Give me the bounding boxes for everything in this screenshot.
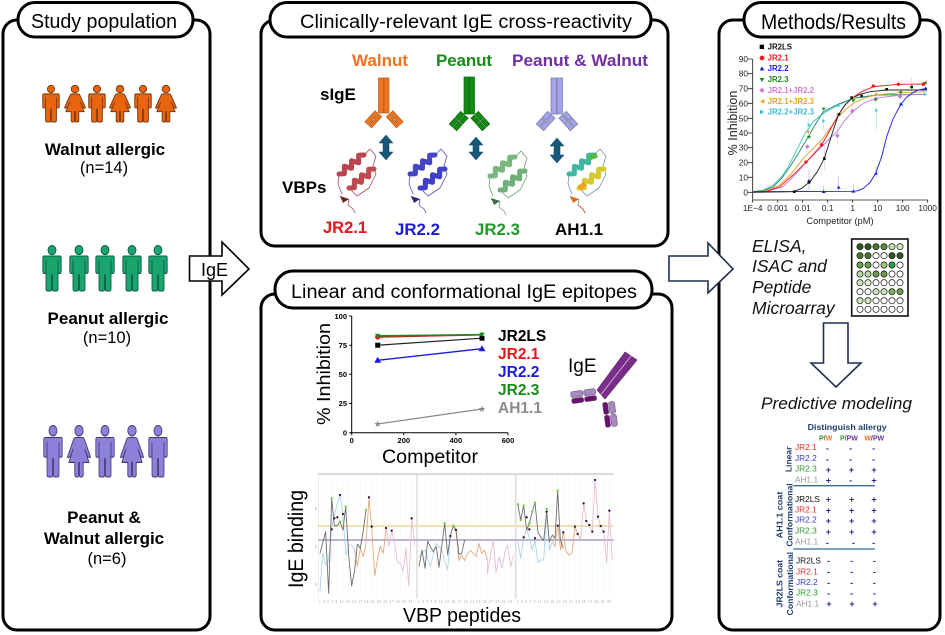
protein labels: JR2.3 <box>475 220 520 239</box>
table: distinguish allergy: + <box>849 465 854 475</box>
table: distinguish allergy: - <box>849 443 852 453</box>
table: distinguish allergy: - <box>852 538 855 548</box>
table: distinguish allergy: - <box>827 556 830 566</box>
heading: study population: Study population <box>31 11 177 33</box>
dose-response chart: 0.01 <box>795 203 811 213</box>
icon: microarray plate <box>852 239 908 316</box>
text: ELISA, ISAC and peptide microarray: Microarray <box>752 298 836 318</box>
legend: inhibition chart: JR2.2 <box>498 364 539 381</box>
icons: peanut allergic people <box>43 245 167 291</box>
label: peanut n: (n=10) <box>83 329 131 347</box>
protein: JR2.2 <box>409 149 447 213</box>
table: distinguish allergy: + <box>826 505 831 515</box>
table: distinguish allergy: Conformational <box>785 552 795 615</box>
legend: dose-response chart: JR2.1+JR2.3 <box>768 97 815 106</box>
table: distinguish allergy: - <box>850 578 853 588</box>
table: distinguish allergy: - <box>850 567 853 577</box>
table: distinguish allergy: + <box>872 599 878 609</box>
table: distinguish allergy: AH1.1 coat <box>774 492 784 538</box>
column labels: Peanut & Walnut <box>512 51 648 70</box>
heading: predictive modeling: Predictive modeling <box>761 394 913 413</box>
table: distinguish allergy: - <box>873 578 876 588</box>
table: distinguish allergy: W/PW <box>864 436 885 443</box>
dose-response chart: 1E−4 <box>743 203 763 213</box>
column labels: Walnut <box>352 51 408 70</box>
line chart: percent inhibition vs competitor: 75 <box>339 341 347 350</box>
legend: inhibition chart: JR2LS <box>498 328 546 345</box>
line chart: peptide microarray: 1 3 5 7 9 11 13 15 17 19 21 23 25 27 29 31 33 <box>517 599 611 603</box>
protein labels: JR2.2 <box>395 220 440 239</box>
label: IgE: IgE <box>568 356 597 377</box>
column labels: Peanut <box>436 51 492 70</box>
table: distinguish allergy: Conformational <box>785 483 795 547</box>
table: distinguish allergy: JR2LS coat <box>775 560 785 607</box>
table: distinguish allergy: AH1.1 <box>796 598 820 608</box>
antibody: walnut <box>365 78 403 128</box>
table: distinguish allergy: - <box>827 567 830 577</box>
dose-response chart: 30 <box>739 143 748 153</box>
table: distinguish allergy: Distinguish allergy <box>808 423 887 432</box>
arrow: down to predictive modeling <box>811 323 861 387</box>
heading: epitopes: Linear and conformational IgE epitopes <box>291 282 637 303</box>
legend: dose-response chart: JR2.2+JR2.3 <box>768 108 815 117</box>
line chart: peptide microarray: 1 3 5 7 9 11 13 15 17 19 21 23 25 27 29 31 33 <box>418 599 512 603</box>
table: distinguish allergy: - <box>873 567 876 577</box>
line chart: peptide microarray: 0 <box>315 544 317 548</box>
table: distinguish allergy: + <box>871 505 877 515</box>
line chart: peptide microarray: 5 <box>315 506 317 510</box>
arrow: experiments into methods <box>669 243 733 293</box>
axis title: IgE binding: IgE binding <box>285 490 308 588</box>
dose-response chart: 80 <box>739 69 748 79</box>
dose-response chart: 50 <box>739 113 748 123</box>
table: distinguish allergy: - <box>826 455 829 465</box>
table: distinguish allergy: Linear <box>784 446 794 472</box>
table: distinguish allergy: + <box>849 495 854 505</box>
dose-response chart: 20 <box>739 158 748 168</box>
line chart: percent inhibition vs competitor: 50 <box>339 370 347 379</box>
line chart: percent inhibition vs competitor: 25 <box>339 399 347 408</box>
line chart: percent inhibition vs competitor: 600 <box>502 436 514 445</box>
heading: cross-reactivity: Clinically-relevant IgE cross-reactivity <box>300 12 633 33</box>
protein: JR2.1 <box>338 149 376 213</box>
label: IgE arrow: IgE <box>201 260 228 280</box>
label: walnut n: (n=14) <box>80 159 128 177</box>
table: distinguish allergy: JR2.1 <box>795 442 817 452</box>
legend: dose-response chart: JR2.2 <box>768 64 789 73</box>
table: distinguish allergy: - <box>826 443 829 453</box>
icons: peanut and walnut allergic people <box>44 426 167 477</box>
label: peanut and walnut allergic: Walnut allergic <box>44 529 164 548</box>
axis title: VBP peptides: VBP peptides <box>403 605 521 627</box>
label: sIgE: sIgE <box>320 85 356 104</box>
table: distinguish allergy: - <box>872 538 875 548</box>
table: distinguish allergy: - <box>872 455 875 465</box>
heading: methods/results: Methods/Results <box>761 11 906 34</box>
axis title: percent inhibition: % Inhibition <box>726 91 740 155</box>
table: distinguish allergy: + <box>826 527 831 537</box>
line chart: peptide microarray: 5 <box>315 583 317 587</box>
column labels <box>352 51 648 70</box>
label: peanut and walnut allergic: Peanut & <box>67 508 141 527</box>
dose-response chart: 0 <box>743 187 748 197</box>
legend: inhibition chart: JR2.3 <box>498 382 540 399</box>
line chart: percent inhibition vs competitor: 0 <box>350 436 354 445</box>
table: distinguish allergy: + <box>826 599 832 609</box>
dose-response chart: 1 <box>850 203 855 213</box>
line chart: percent inhibition vs competitor: ★ <box>478 404 486 414</box>
table: distinguish allergy: + <box>871 527 877 537</box>
table: distinguish allergy: JR2LS <box>796 556 821 566</box>
table: distinguish allergy: + <box>871 465 877 475</box>
table: distinguish allergy: + <box>849 516 854 526</box>
table: distinguish allergy: JR2.1 <box>795 504 817 514</box>
double arrow: peanut and walnut <box>550 138 564 163</box>
label: peanut and walnut n: (n=6) <box>88 550 126 568</box>
table: distinguish allergy: + <box>826 465 831 475</box>
table: distinguish allergy: JR2.3 <box>796 588 818 598</box>
table: distinguish allergy: - <box>873 556 876 566</box>
dose-response chart: 10 <box>739 172 748 182</box>
table: distinguish allergy: JR2.2 <box>796 577 818 587</box>
line chart: peptide microarray: 1 3 5 7 9 11 13 15 17 19 21 23 25 27 29 31 33 <box>319 599 413 603</box>
panel: study population <box>3 2 210 630</box>
label: walnut allergic: Walnut allergic <box>45 140 165 159</box>
legend: dose-response chart: JR2.1+JR2.2 <box>768 86 815 95</box>
legend: dose-response chart: JR2.1 <box>768 53 789 62</box>
double arrow: peanut <box>469 137 483 160</box>
line chart: percent inhibition vs competitor: 100 <box>334 312 347 321</box>
table: distinguish allergy: JR2.1 <box>796 566 818 576</box>
line chart: percent inhibition vs competitor <box>334 312 514 445</box>
label: peanut and walnut allergic <box>44 508 164 548</box>
table: distinguish allergy: + <box>849 599 855 609</box>
table: distinguish allergy: - <box>850 556 853 566</box>
protein: JR2.3 <box>489 151 527 215</box>
legend: dose-response chart: JR2.3 <box>768 75 789 84</box>
dose-response chart: 1000 <box>918 203 937 213</box>
dose-response chart <box>739 42 937 213</box>
text: ELISA, ISAC and peptide microarray: Peptide <box>752 277 812 297</box>
table: distinguish allergy: P/W <box>819 436 833 443</box>
table: distinguish allergy: - <box>827 589 830 599</box>
panel: methods and results <box>719 2 940 630</box>
table: distinguish allergy: - <box>826 538 829 548</box>
table: distinguish allergy: - <box>850 589 853 599</box>
table: distinguish allergy: - <box>849 476 852 486</box>
table: distinguish allergy: - <box>827 578 830 588</box>
dose-response chart: 0.001 <box>767 203 788 213</box>
table: distinguish allergy: JR2.3 <box>795 526 817 536</box>
icon: tilted IgE antibody <box>570 352 637 428</box>
table: distinguish allergy: AH1.1 <box>795 536 819 546</box>
table: distinguish allergy: + <box>849 527 854 537</box>
table: distinguish allergy: AH1.1 <box>795 475 819 485</box>
panel: clinically-relevant cross-reactivity <box>261 2 668 246</box>
protein labels: AH1.1 <box>555 220 603 239</box>
protein: AH1.1 <box>568 149 606 213</box>
line chart: percent inhibition vs competitor: 400 <box>450 436 462 445</box>
label: VBPs: VBPs <box>282 178 326 197</box>
line chart: percent inhibition vs competitor: 0 <box>343 428 347 438</box>
protein labels <box>323 218 603 239</box>
table: distinguish allergy: - <box>872 443 875 453</box>
dose-response chart: 60 <box>739 98 748 108</box>
table: distinguish allergy: + <box>871 476 877 486</box>
table: distinguish allergy: JR2.3 <box>795 464 817 474</box>
arrow: IgE into experiments <box>190 242 249 295</box>
table: distinguish allergy: - <box>873 589 876 599</box>
text: ELISA, ISAC and peptide microarray: ISAC and <box>752 256 828 276</box>
axis title: percent inhibition: % Inhibition <box>314 323 334 425</box>
axis title: competitor (pM): Competitor (pM) <box>806 216 874 226</box>
line chart: percent inhibition vs competitor: 200 <box>398 436 410 445</box>
line chart: peptide microarray <box>315 474 614 603</box>
table: distinguish allergy <box>774 423 887 615</box>
table: distinguish allergy: + <box>826 516 831 526</box>
dose-response chart: 70 <box>739 84 748 94</box>
protein labels: JR2.1 <box>323 218 367 237</box>
antibody: peanut and walnut <box>536 78 578 131</box>
double arrow: walnut <box>379 135 393 160</box>
panel: linear and conformational epitopes <box>261 271 672 630</box>
dose-response chart: 100 <box>896 203 910 213</box>
antibody: peanut <box>449 77 490 131</box>
dose-response chart: 0.1 <box>822 203 834 213</box>
legend: dose-response chart <box>759 42 815 117</box>
dose-response chart: 40 <box>739 128 748 138</box>
icons: walnut allergic people <box>43 85 176 122</box>
text: ELISA, ISAC and peptide microarray <box>752 236 836 318</box>
legend: inhibition chart: AH1.1 <box>498 400 542 417</box>
label: peanut allergic: Peanut allergic <box>48 309 168 328</box>
line chart: percent inhibition vs competitor: ★ <box>374 419 382 429</box>
table: distinguish allergy: JR2.2 <box>795 515 817 525</box>
table: distinguish allergy: - <box>849 455 852 465</box>
legend: dose-response chart: JR2LS <box>768 42 792 51</box>
legend: inhibition chart: JR2.1 <box>498 346 540 363</box>
table: distinguish allergy: + <box>871 516 877 526</box>
dose-response chart: 10 <box>873 203 883 213</box>
table: distinguish allergy: + <box>871 495 877 505</box>
dose-response chart: 90 <box>739 54 748 64</box>
table: distinguish allergy: + <box>849 505 854 515</box>
table: distinguish allergy: + <box>826 495 831 505</box>
table: distinguish allergy: JR2.2 <box>795 453 817 463</box>
table: distinguish allergy: + <box>826 476 831 486</box>
text: ELISA, ISAC and peptide microarray: ELISA, <box>752 236 806 256</box>
axis title: competitor: Competitor <box>382 447 479 468</box>
table: distinguish allergy: JR2LS <box>795 494 820 504</box>
legend: inhibition chart <box>498 328 546 417</box>
table: distinguish allergy: P/PW <box>840 436 858 443</box>
